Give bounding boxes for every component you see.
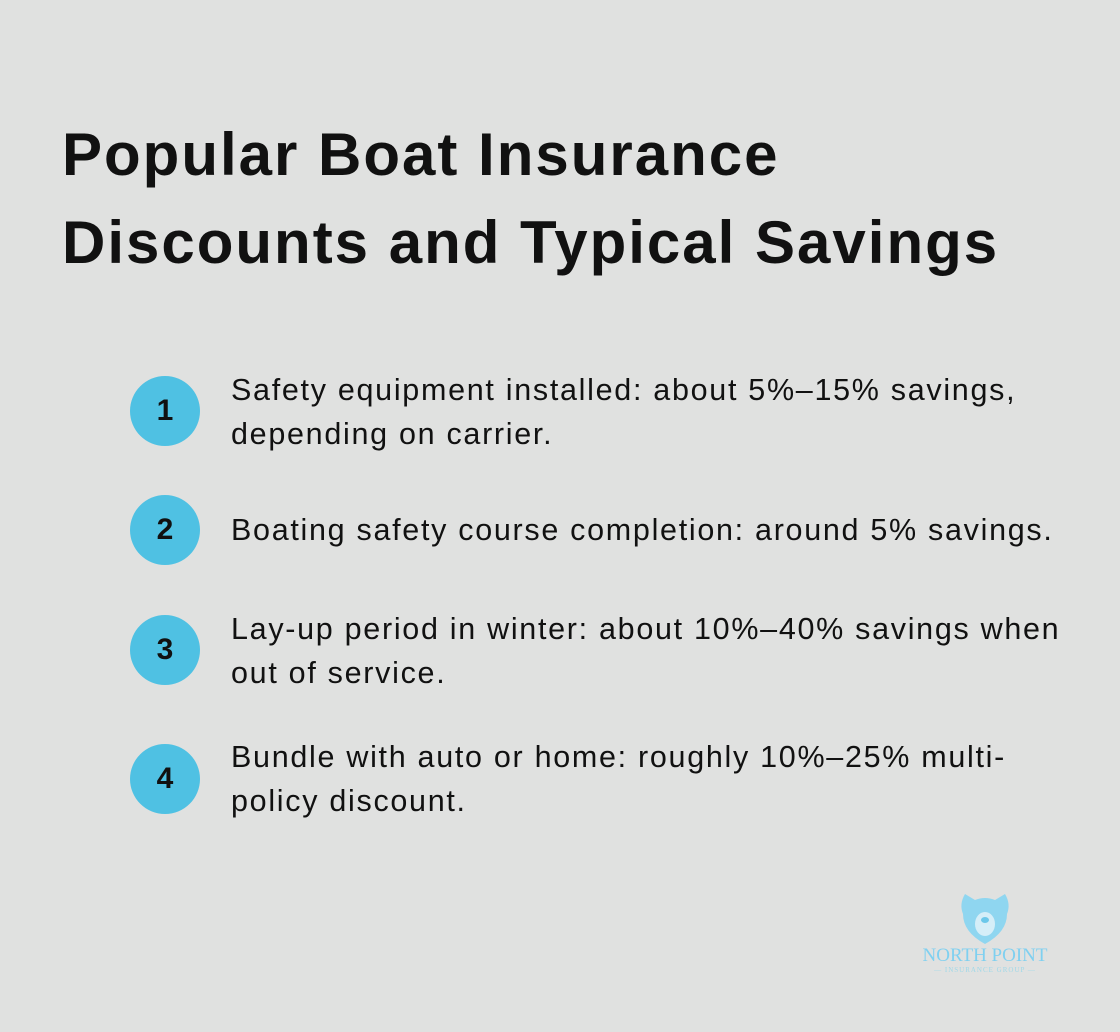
item 2 bbox=[130, 495, 1054, 565]
title: Discounts and Typical Savings bbox=[62, 209, 999, 276]
number badge 4: 4 bbox=[157, 762, 173, 795]
text 4 bbox=[231, 740, 1006, 818]
logo bbox=[922, 894, 1048, 974]
text 2: Boating safety course completion: around 5% savings. bbox=[231, 513, 1054, 547]
number badge 3 bbox=[130, 615, 200, 685]
item 3 bbox=[130, 612, 1060, 690]
number badge 3: 3 bbox=[157, 633, 173, 666]
text 4: policy discount. bbox=[231, 784, 467, 818]
text 1: Safety equipment installed: about 5%–15% savings, bbox=[231, 373, 1016, 407]
logo text: NORTH POINT bbox=[922, 945, 1048, 966]
number badge 4 bbox=[130, 744, 200, 814]
icon: bear head bbox=[961, 894, 1009, 944]
item 1 bbox=[130, 373, 1016, 451]
text 1: depending on carrier. bbox=[231, 417, 553, 451]
item 4 bbox=[130, 740, 1006, 818]
text 3: Lay-up period in winter: about 10%–40% savings when bbox=[231, 612, 1060, 646]
logo: — INSURANCE GROUP — bbox=[934, 966, 1036, 974]
text 3 bbox=[231, 612, 1060, 690]
number badge 1: 1 bbox=[157, 394, 173, 427]
title bbox=[62, 121, 999, 276]
text 3: out of service. bbox=[231, 656, 446, 690]
number badge 2: 2 bbox=[157, 513, 173, 546]
title: Popular Boat Insurance bbox=[62, 121, 779, 188]
number badge 2 bbox=[130, 495, 200, 565]
text 4: Bundle with auto or home: roughly 10%–25% multi- bbox=[231, 740, 1006, 774]
number badge 1 bbox=[130, 376, 200, 446]
text 1 bbox=[231, 373, 1016, 451]
